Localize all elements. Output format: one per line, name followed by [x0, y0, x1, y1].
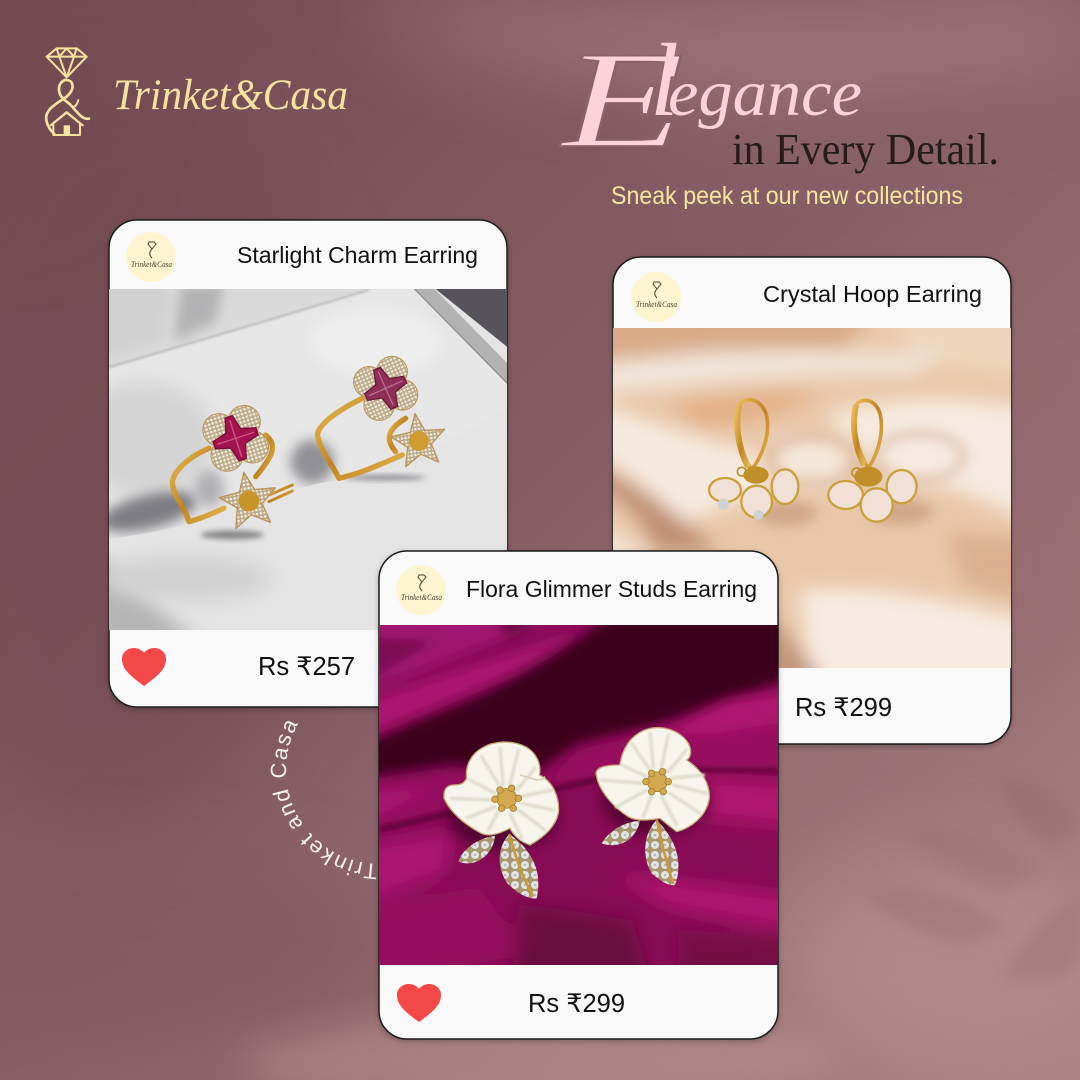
subheading: in Every Detail.	[732, 125, 999, 174]
product title: Crystal Hoop Earring	[763, 281, 982, 307]
left clover	[202, 404, 270, 472]
panel: Flora Glimmer Studs Earring card	[362, 551, 796, 1039]
right leaves	[602, 821, 640, 845]
price: Rs ₹299	[795, 694, 892, 722]
brand badge	[126, 232, 176, 282]
script word Elegance: l	[650, 23, 679, 138]
left star	[218, 472, 276, 530]
left flower	[444, 742, 559, 845]
tagline: Sneak peek at our new collections	[611, 182, 963, 210]
flower stamens	[492, 768, 672, 812]
brand badge	[396, 565, 446, 615]
earrings: flower studs	[444, 728, 712, 899]
brand badge: Trinket&Casa	[131, 259, 172, 269]
product photo: magenta satin with flower studs	[379, 625, 778, 965]
brand badge: Trinket&Casa	[401, 592, 442, 602]
logo wordmark: Trinket&Casa	[113, 72, 348, 119]
price: Rs ₹299	[528, 990, 625, 1018]
upper cushion	[109, 289, 394, 372]
right flower	[596, 728, 709, 832]
earrings: opal hoops	[709, 400, 963, 527]
icon: heart	[397, 984, 441, 1022]
earrings: clover and star	[172, 351, 449, 530]
fold shadows	[109, 484, 202, 538]
product photo: peach satin with hoops	[613, 328, 1011, 668]
brand badge	[631, 272, 681, 322]
icon: diamond, ampersand and house	[46, 48, 89, 135]
left leaves	[458, 836, 495, 863]
right star	[390, 412, 446, 468]
panel: Crystal Hoop Earring card	[596, 257, 1030, 744]
product title: Flora Glimmer Studs Earring	[466, 576, 757, 602]
box frame	[416, 289, 507, 382]
headline: Elegance in Every Detail	[559, 23, 999, 210]
icon: heart	[122, 648, 166, 686]
script word Elegance: egance	[668, 57, 862, 130]
right clover	[353, 356, 418, 421]
panel: Starlight Charm Earring card	[69, 220, 509, 707]
product photo: grey box with gold earrings	[69, 268, 509, 652]
script word Elegance: E	[559, 23, 684, 176]
product title: Starlight Charm Earring	[237, 242, 478, 268]
price: Rs ₹257	[258, 653, 355, 681]
curved text: Trinket and Casa: Trinket and Casa	[270, 721, 376, 880]
brand badge: Trinket&Casa	[636, 299, 677, 309]
logo: Trinket&Casa	[46, 48, 348, 135]
